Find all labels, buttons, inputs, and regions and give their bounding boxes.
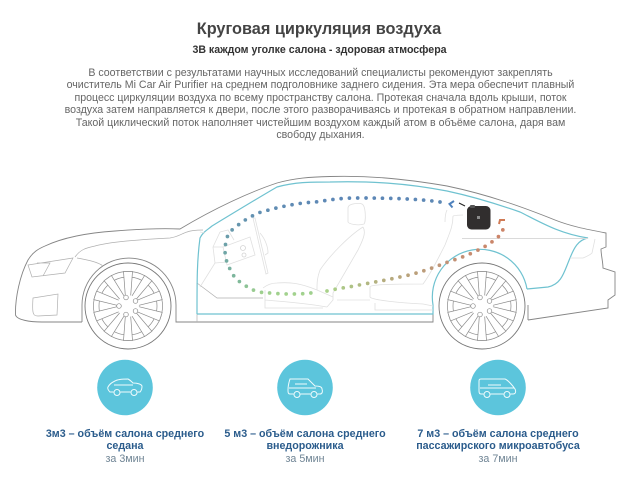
interior: dashboard, steering wheel and seats <box>200 203 595 310</box>
caption: minivan: за 7мин <box>478 453 517 465</box>
airflow dots: floor and rear <box>327 228 503 291</box>
caption: minivan: 7 м3 – объём салона среднего <box>417 428 579 440</box>
badge: SUV <box>277 360 333 415</box>
teal cabin outline <box>197 182 588 314</box>
caption: SUV: внедорожника <box>266 440 344 452</box>
airflow dots: roof and front <box>225 198 440 294</box>
arrow: incoming orange <box>499 220 505 224</box>
description text: воздуха затем направляется к двери, после этого разворачиваясь и протекая в обратном направлении. <box>65 104 576 116</box>
caption: SUV: за 5мин <box>286 453 324 465</box>
air purifier device <box>467 205 490 230</box>
caption: sedan: за 3мин <box>106 453 144 465</box>
caption: sedan <box>46 428 204 465</box>
description text: Такой циклический поток наполняет чистейшим воздухом каждый атом в объёме салона, даря вам <box>76 117 565 129</box>
description text: процесс циркуляции воздуха по всему пространству салона. Протекая сначала вдоль крыши, поток <box>74 92 567 104</box>
badge: sedan <box>97 360 153 415</box>
subtitle: 3В каждом уголке салона - здоровая атмосфера <box>192 44 447 56</box>
headlight and body details <box>28 230 263 322</box>
caption: sedan: седана <box>106 440 144 452</box>
rear shelf line <box>462 238 588 240</box>
caption: SUV <box>224 428 386 465</box>
title: Круговая циркуляция воздуха <box>197 20 441 38</box>
caption: SUV: 5 м3 – объём салона среднего <box>224 428 386 440</box>
arrow: outgoing blue <box>450 201 454 208</box>
caption: sedan: 3м3 – объём салона среднего <box>46 428 204 440</box>
description text: очиститель Mi Car Air Purifier на среднем подголовнике заднего сидения. Эта мера обеспечит плавный <box>67 79 574 91</box>
purifier airflow dashes <box>459 203 465 206</box>
badge: minivan <box>470 360 526 415</box>
caption: minivan <box>416 428 580 465</box>
description text <box>65 66 576 141</box>
caption: minivan: пассажирского микроавтобуса <box>416 440 580 452</box>
description text: В соответствии с результатами научных исследований специалисты рекомендуют закреплять <box>88 66 553 78</box>
rear wheel <box>439 263 525 349</box>
description text: свободу дыхания. <box>276 129 365 141</box>
car body outline <box>15 176 615 322</box>
front wheel <box>85 263 171 349</box>
